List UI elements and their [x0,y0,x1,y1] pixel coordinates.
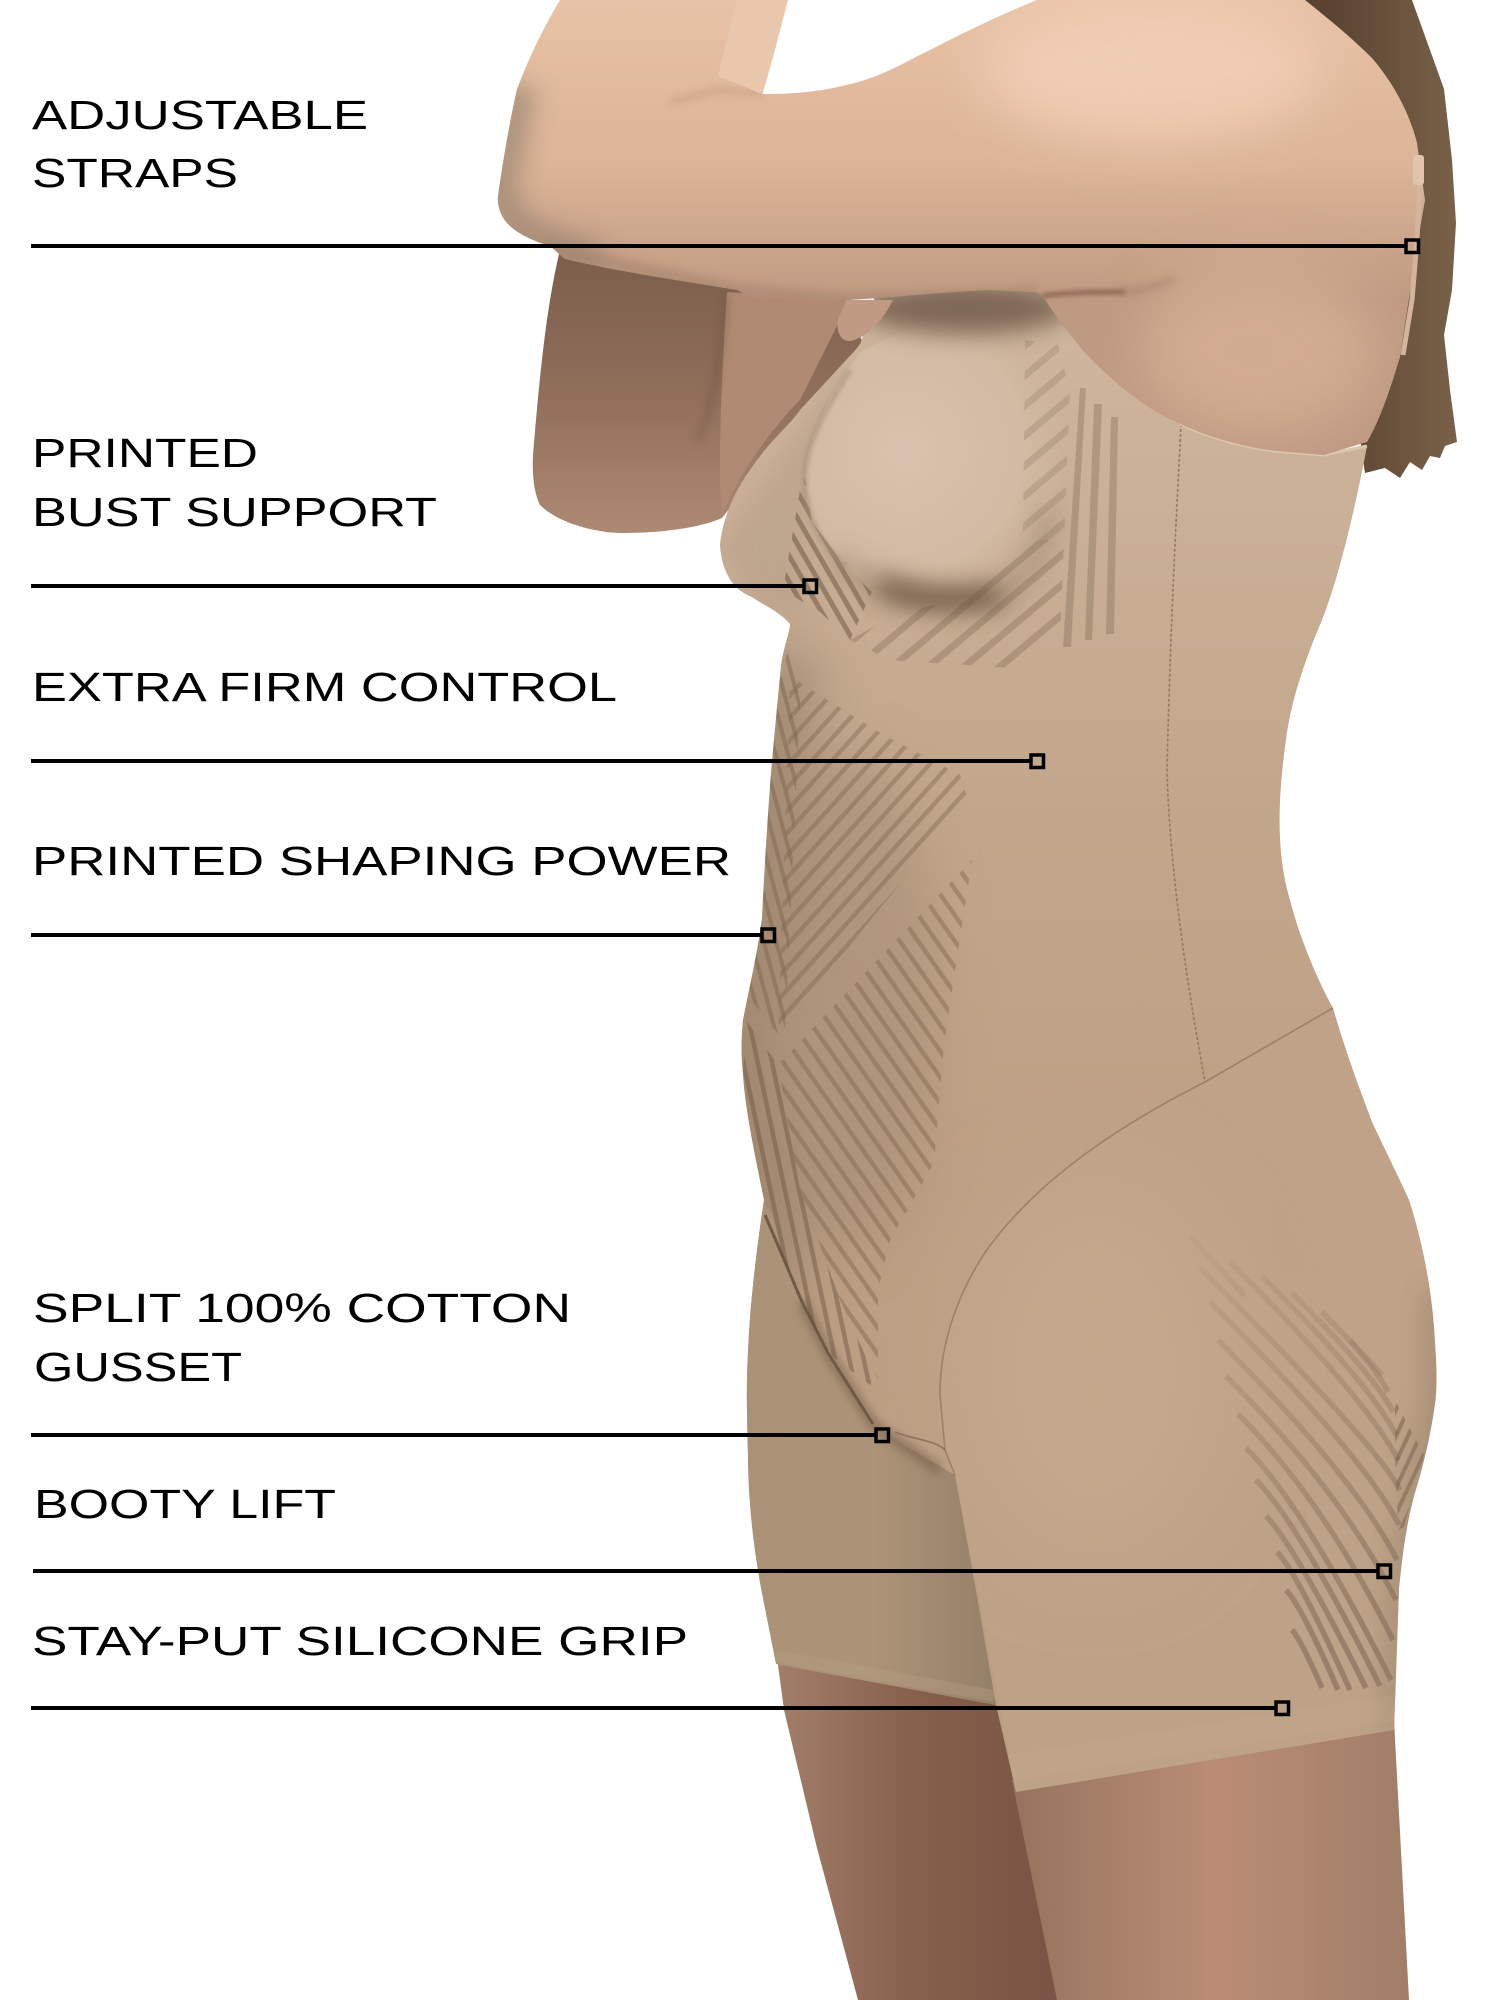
underarm warm tone [1140,265,1380,435]
arm underside shade [540,248,1037,302]
belly stripes upper right [778,676,968,1034]
label: printed: PRINTED [32,430,258,476]
suit base [700,280,1450,1810]
far leg hem band [1010,1708,1394,1768]
label: printed shaping power: PRINTED SHAPING POWER [32,838,731,884]
far thigh [1012,1720,1409,2000]
label: stay-put silicone grip: STAY-PUT SILICONE GRIP [32,1618,688,1664]
gusset seam [895,1432,945,1450]
strap [1403,185,1420,355]
strap adjuster [1413,155,1424,185]
near leg hem band [776,1656,994,1696]
belly shade [743,650,781,1353]
callout: adjustable straps [31,240,1418,252]
chest skin beside arm [720,292,850,516]
label: adjustable straps: ADJUSTABLE [32,92,368,138]
armpit crease [1042,292,1125,296]
bust pattern diagonal stripes lower [850,540,1064,668]
hip stripes [1208,1275,1402,1691]
under-bust deep shadow [880,585,1000,600]
shoulder highlight [980,0,1320,140]
elbow crease [670,90,762,102]
crotch shadow [802,1302,940,1470]
front bust chevrons [783,478,872,640]
far breast shade [733,409,822,611]
under-arm shadow [860,282,1070,334]
label: split cotton: SPLIT 100% COTTON [33,1285,571,1331]
label: gusset: GUSSET [34,1344,242,1390]
bodysuit [700,280,1450,1810]
bust neckline trim [1180,424,1367,455]
hip chevrons [1395,1400,1424,1530]
armpit crease fade [1120,278,1175,292]
callout lines and markers [31,240,1418,1714]
elbow shade [498,85,600,262]
near breast [805,344,1032,579]
labels [32,92,731,1664]
waist seam [940,1008,1333,1475]
side seam [1167,424,1205,1082]
hip right shade [1394,1290,1437,1730]
callout: gusset [31,1429,888,1442]
back hand [700,0,788,104]
back arm [533,250,862,533]
hair [1290,0,1457,478]
belly stripes lower left [743,1020,876,1385]
label: straps: STRAPS [32,150,238,196]
bust pattern diagonal stripes upper [1023,340,1070,540]
crease between legs [765,1215,873,1424]
near leg panel [740,1200,996,1705]
callout: printed bust support [31,580,816,592]
label: extra firm control: EXTRA FIRM CONTROL [32,664,617,710]
callout: silicone grip [31,1702,1288,1714]
callout: printed shaping power [31,929,774,942]
near breast outline [805,370,850,567]
under-bust broad shadow [835,510,1050,597]
belly stripes lower right [778,860,972,1379]
back of arm and shoulder [490,0,1430,460]
near leg [776,1650,1060,2000]
belly pattern tone [790,757,934,1236]
thigh highlight [965,1180,1225,1560]
arm base [490,0,1430,460]
callout: extra firm control [31,755,1044,768]
thigh panel [1333,1008,1435,1724]
back arm crease [698,295,727,442]
bust pattern vertical bars [1063,388,1118,647]
label: booty lift: BOOTY LIFT [34,1481,336,1527]
callout: booty lift [33,1565,1390,1578]
belly stripes upper left [746,650,800,1034]
label: bust support: BUST SUPPORT [32,489,437,535]
figure: model wearing bodysuit [490,0,1457,2000]
skin neckline gap [838,300,893,341]
